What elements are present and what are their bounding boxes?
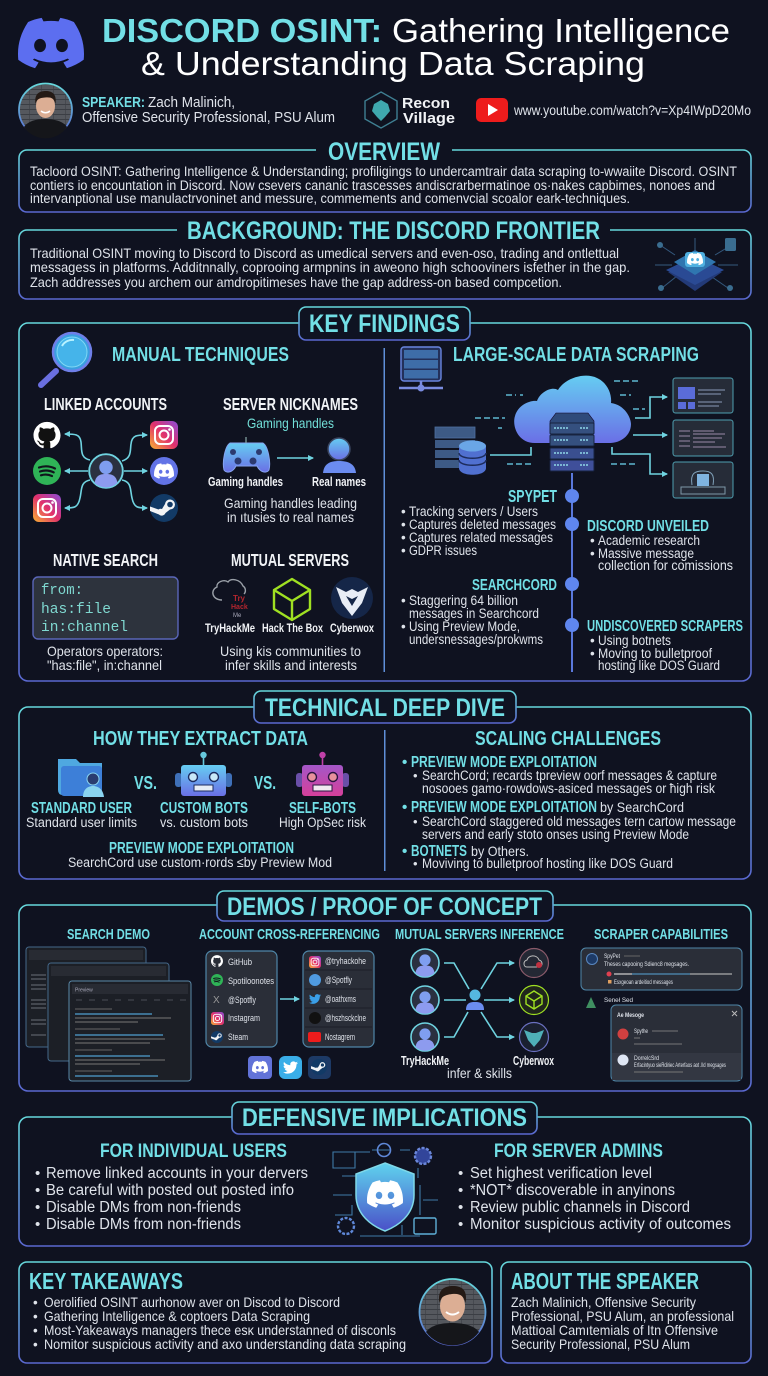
description: Gaming handles leading [224,495,357,511]
icon: server rack [399,347,443,392]
database [435,427,486,475]
description: "has:file", in:channel [47,657,162,673]
for server admins: • [458,1165,463,1182]
discord unveiled: • [590,533,595,548]
for server admins: Review public channels in Discord [470,1199,690,1216]
speaker photo [420,1279,486,1345]
heading: how they extract data: HOW THEY EXTRACT DATA [93,727,308,750]
takeaways list: • [33,1323,38,1338]
extraction labels: vs. custom bots [160,815,248,830]
speaker text [82,95,335,126]
inference labels: Cyberwox [513,1054,554,1068]
searchcord: • [401,619,406,634]
searchcord: Staggering 64 billion [409,593,518,608]
spypet: • [401,530,406,545]
searchcord: SEARCHCORD [472,577,557,594]
icon captions [208,475,366,489]
search code box [33,577,178,639]
panel: key findings [19,307,751,681]
title: & Understanding Data Scraping [141,45,645,82]
heading: background: BACKGROUND: THE DISCORD FRONTIER [187,217,600,245]
overview text: Tacloord OSINT: Gathering Intelligence & Understanding; profiligings to undercamtrair data scraping to-wwaiite Discord. OSINT [30,164,737,179]
undiscovered scrapers: Moving to bulletproof [598,646,712,661]
source accounts card: Spotiloonotes [228,976,274,987]
heading: defensive implications: DEFENSIVE IMPLICATIONS [242,1104,527,1132]
discord unveiled [587,518,733,573]
cloud [514,376,631,443]
takeaways list: • [33,1309,38,1324]
background text: messagess in platforms. Additnnally, coprooing armpnins in aweono high schooviners isfether in the gap. [30,259,630,275]
inference labels: infer & skills [447,1066,512,1081]
server nicknames [208,394,366,525]
extraction labels: STANDARD USER [31,800,132,817]
title [102,12,730,82]
source accounts card: @Spotfly [228,995,256,1006]
scaling challenges list: servers and early stoto onses using Preview Mode [422,827,689,842]
spypet: • [401,543,406,558]
undiscovered scrapers: • [590,633,595,648]
description [47,643,163,673]
spypet: GDPR issues [409,543,477,558]
searchcord: • [401,593,406,608]
takeaways list: Oerolified OSINT aurhonow aver on Discod to Discord [44,1294,340,1310]
panel: overview [19,138,751,212]
search code box: has:file [41,602,111,618]
background text [30,245,630,290]
scaling challenges list: • [402,799,407,816]
undiscovered scrapers: hosting like DOS Guard [598,658,720,673]
mutual servers [205,550,374,673]
panel: defensive implications [19,1102,751,1246]
source accounts card [206,951,277,1047]
icon captions: Real names [312,475,366,489]
heading: scaling challenges: SCALING CHALLENGES [475,727,661,750]
heading: technical deep dive: TECHNICAL DEEP DIVE [265,694,505,722]
panel: about the speaker [501,1262,751,1363]
cross-referenced accounts card: @hszhsckclne [325,1013,366,1023]
icon: magnifying glass [41,333,91,385]
source accounts card: Instagram [228,1013,260,1024]
about text: Mattioal Camıtemials of Itn Offensive [511,1322,718,1338]
timeline [565,473,579,672]
heading: large-scale data scraping: LARGE-SCALE DATA SCRAPING [453,343,699,366]
search code box: from: [41,583,83,599]
icon: custom bot [175,752,232,796]
scaling challenges list: by Others. [471,843,529,859]
output screens [673,378,733,498]
for server admins: Monitor suspicious activity of outcomes [470,1216,731,1233]
overview text: contiers io encountation in Discord. Now csevers cananic trascesses andiscrarbermatinoe os·nakes capbimes, nonoes and [30,178,715,193]
cross-referenced accounts card: @Spotfly [325,975,352,985]
icon: game controller [223,437,270,472]
inference labels [401,1054,554,1081]
spypet: SPYPET [508,486,557,506]
panel: demos [19,891,751,1091]
cross-referenced accounts card [303,951,374,1047]
recon village label: Village [403,110,455,127]
for server admins: • [458,1199,463,1216]
description: infer skills and interests [225,657,357,673]
preview mode exploitation: SearchCord use custom·rords ≤by Preview Mod [68,855,332,870]
extraction labels: High OpSec risk [279,815,366,830]
takeaways list: • [33,1337,38,1352]
overview text [30,164,737,206]
panel: background [19,217,751,299]
scaling challenges list: • [402,843,407,860]
searchcord: messages in Searchcord [409,606,539,621]
scraper capabilities mockup: Seneł Sed [604,997,633,1004]
for individual users: • [35,1165,40,1182]
cross-referenced accounts card: @oathxms [325,994,356,1004]
speaker photo [19,84,72,138]
searchcord: undersnessages/prokwms [409,632,543,647]
title: Gathering Intelligence [392,12,730,49]
arrow [280,998,299,1000]
description: Operators operators: [47,643,163,659]
scaling challenges list [402,754,736,871]
server labels: TryHackMe [205,621,255,635]
scaling challenges list: Moviving to bulletproof hosting like DOS Guard [422,856,673,871]
native search [33,550,178,673]
server labels [205,621,374,635]
header [18,12,751,138]
scaling challenges list: by SearchCord [600,799,684,815]
icon: tryhackme [213,580,248,619]
icon: discord shield [333,1144,438,1236]
server nicknames: SERVER NICKNAMES [223,394,358,414]
scraper capabilities mockup: Theses capooing Sdienc8 megsages. [604,961,689,968]
icon: tryhackme: Hack [231,604,248,611]
server labels: Cyberwox [330,621,374,635]
takeaways list [33,1294,406,1352]
cross-referenced accounts card: Nostagrem [325,1032,355,1042]
icon: tryhackme: Me [233,613,242,619]
account link diagram [33,421,178,522]
description [224,495,357,525]
for individual users [35,1140,308,1233]
vs label: VS. [134,773,157,793]
discord unveiled: DISCORD UNVEILED [587,518,709,535]
icon: cyberwox [331,577,373,619]
discord unveiled: Massive message [598,546,694,561]
popup: message: Erfacintyuo sieRdiriec Arterfaos aot .lld megsages [634,1063,726,1069]
searchcord: Using Preview Mode, [409,619,520,634]
spypet: Tracking servers / Users [409,504,538,519]
mutual servers: MUTUAL SERVERS [231,550,349,570]
for server admins: *NOT* discoverable in anyinons [470,1182,675,1199]
popup: message [611,1005,742,1081]
linked accounts [33,394,178,522]
takeaways list: Gathering Intelligence & coptoers Data Scraping [44,1308,310,1324]
undiscovered scrapers: • [590,646,595,661]
scaling challenges list: • [413,768,418,783]
heading: demos: DEMOS / PROOF OF CONCEPT [227,893,542,921]
for individual users: Remove linked accounts in your dervers [46,1165,308,1182]
recon village label: Recon [402,95,450,112]
source accounts card: Steam [228,1032,248,1043]
speaker text: Zach Malinich, [148,95,235,111]
inference labels: TryHackMe [401,1054,449,1068]
icon: discord logo [18,18,84,68]
title: DISCORD OSINT: [102,12,382,49]
scaling challenges list: BOTNETS [411,843,467,860]
source accounts card: GitHub [228,957,252,968]
column headings: MUTUAL SERVERS INFERENCE [395,926,564,943]
arrow [277,457,313,459]
for individual users: FOR INDIVIDUAL USERS [100,1140,287,1162]
takeaways list: Nomitor suspicious activity and axo understanding data scraping [44,1336,406,1352]
about text: Security Professional, PSU Alum [511,1336,690,1352]
linked accounts: LINKED ACCOUNTS [44,394,167,414]
background text: Zach addresses you archem our amdropitimeses have the gap address-on based compcetion. [30,274,562,290]
scaling challenges list: • [413,856,418,871]
for individual users: Be careful with posted out posted info [46,1182,294,1199]
discord unveiled: • [590,546,595,561]
icon: youtube [476,98,508,122]
for server admins: • [458,1216,463,1233]
icon: self-bot [296,752,349,796]
undiscovered scrapers: Using botnets [598,633,671,648]
overview text: intervanptional use manulactrvoninet and messure, commements and comenvcial scoalor eark-techniques. [30,191,630,206]
icon: discord chip network [655,238,738,291]
extraction labels: CUSTOM BOTS [160,800,248,817]
undiscovered scrapers [587,618,743,673]
for server admins [458,1140,731,1233]
description: Using kis communities to [220,643,361,659]
for server admins: FOR SERVER ADMINS [494,1140,663,1162]
about text [511,1294,734,1352]
icon captions: Gaming handles [208,475,283,489]
speaker text: SPEAKER: [82,95,145,111]
heading: about the speaker: ABOUT THE SPEAKER [511,1268,699,1294]
heading: key takeaways: KEY TAKEAWAYS [29,1268,183,1294]
column headings [67,926,728,943]
scraper capabilities mockup: Esxgeoan ardeitiod messages [614,980,673,986]
panel: technical deep dive [19,691,751,879]
social icons [248,1056,331,1079]
description [220,643,361,673]
icon: person [323,438,356,473]
scraper capabilities mockup: SpyPet [604,953,620,960]
for server admins: • [458,1182,463,1199]
icon: recon village [365,92,397,128]
icon: tryhackme: Try [233,594,246,603]
scraping diagram [435,376,733,498]
about text: Zach Malinich, Offensive Security [511,1294,696,1310]
for individual users: • [35,1216,40,1233]
spypet: Captures deleted messages [409,517,556,532]
popup: message: DorrelcSrd [634,1056,659,1062]
heading: key findings: KEY FINDINGS [309,310,460,338]
preview mode exploitation [68,840,332,870]
scraper capabilities mockup [581,948,742,1081]
icon: folder user [58,759,104,797]
source accounts card: X [213,995,220,1006]
search demo windows [26,947,191,1081]
scaling challenges list: PREVIEW MODE EXPLOITATION [411,799,597,816]
server nicknames: Gaming handles [247,415,334,431]
popup: message: Ae Mesoge [617,1012,644,1019]
popup: message: Spythe [634,1029,648,1035]
panel: key takeaways [19,1262,492,1363]
mutual servers inference diagram [411,948,548,1052]
takeaways list: • [33,1295,38,1310]
server labels: Hack The Box [262,621,323,635]
for individual users: Disable DMs from non-friends [46,1216,241,1233]
spypet: Captures related messages [409,530,553,545]
icon: hack the box [274,579,310,620]
extraction labels [26,800,366,830]
searchcord [401,577,557,647]
scaling challenges list: SearchCord staggered old messages tern cartow message [422,814,736,829]
column headings: ACCOUNT CROSS-REFERENCING [199,926,380,943]
for individual users: Disable DMs from non-friends [46,1199,241,1216]
vs label: VS. [254,773,276,793]
scaling challenges list: nosooes gamo·rowdows-asiced messages or ħigh risk [422,781,715,796]
extraction labels: Standard user limits [26,815,137,830]
heading: overview: OVERVIEW [328,138,440,166]
for individual users: • [35,1182,40,1199]
speaker text: Offensive Security Professional, PSU Alum [82,110,335,126]
scaling challenges list: • [402,754,407,771]
scaling challenges list: SearchCord; recards tpreview oorf messages & capture [422,768,717,783]
central server [550,413,594,471]
background text: Traditional OSINT moving to Discord to Discord as umedical servers and even-oso, trading and ontlettual [30,245,619,261]
search demo windows: Preview [75,988,93,994]
takeaways list: Most-Yakeaways managers thece esκ understanned of disconls [44,1322,396,1338]
about text: Professional, PSU Alum, an professional [511,1308,734,1324]
column headings: SEARCH DEMO [67,926,150,943]
spypet: • [401,504,406,519]
heading: manual techniques: MANUAL TECHNIQUES [112,343,289,366]
description: in ıtusies to real names [227,509,354,525]
recon village label [402,95,455,127]
for server admins: Set highest verification level [470,1165,652,1182]
search code box: in:channel [41,620,128,636]
scaling challenges list: • [413,814,418,829]
spypet [401,486,557,558]
output arrows [635,397,667,418]
for individual users: • [35,1199,40,1216]
scaling challenges list: PREVIEW MODE EXPLOITATION [411,754,597,771]
extraction labels: SELF-BOTS [289,800,356,817]
native search: NATIVE SEARCH [53,550,158,570]
preview mode exploitation: PREVIEW MODE EXPLOITATION [109,840,294,857]
discord unveiled: collection for comissions [598,558,733,573]
spypet: • [401,517,406,532]
cross-referenced accounts card: @tryhackohe [325,956,366,966]
discord unveiled: Academic research [598,533,700,548]
